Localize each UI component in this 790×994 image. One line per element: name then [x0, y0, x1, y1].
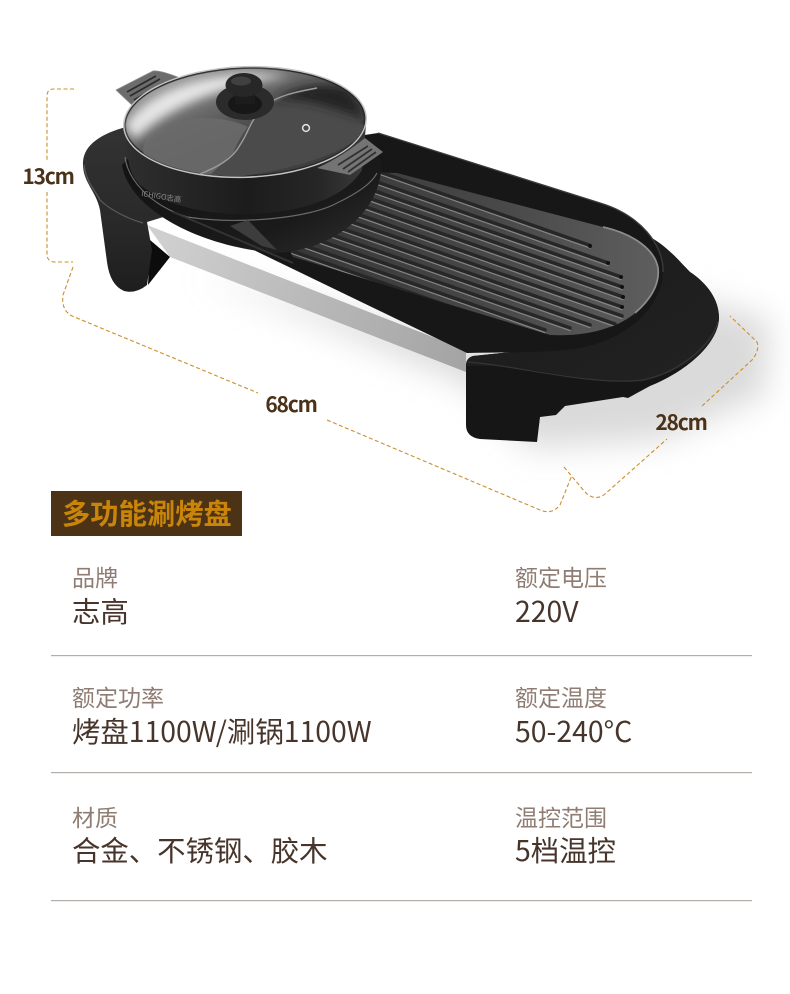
well divider	[230, 220, 277, 250]
dimension label: 13cm: 13cm	[22, 161, 74, 191]
lid knob	[216, 73, 274, 120]
spec: material: 合金、不锈钢、胶木	[72, 829, 328, 870]
pot well	[122, 120, 381, 253]
left foot and platform	[83, 126, 175, 292]
right platform edge	[468, 322, 718, 381]
well ring highlight	[125, 157, 377, 220]
pot body	[127, 125, 366, 214]
spec: material	[72, 799, 328, 870]
grill surface	[250, 170, 658, 335]
vent	[303, 125, 309, 131]
tray upper rim	[378, 133, 663, 272]
spec: rated temperature: 额定温度	[515, 679, 607, 713]
spec: rated temperature	[515, 679, 632, 751]
spec: rated power: 烤盘1100W/涮锅1100W	[72, 710, 372, 751]
dimension line: width	[564, 316, 758, 498]
pot interior left	[143, 118, 248, 176]
heading badge: 多功能涮烤盘	[62, 492, 232, 533]
spec: rated power: 额定功率	[72, 679, 164, 713]
spec: temperature control range	[515, 799, 616, 870]
lid divider	[200, 88, 317, 174]
dimension line: length	[63, 267, 572, 512]
dimension label: 28cm: 28cm	[655, 407, 707, 437]
glass lid	[121, 62, 369, 182]
spec: rated power	[72, 679, 372, 751]
spec: material: 材质	[72, 799, 118, 833]
tray	[130, 133, 663, 353]
spec: temperature control range: 5档温控	[515, 829, 616, 870]
product photo: hot pot and grill	[83, 62, 770, 448]
left handle	[116, 71, 180, 108]
pot interior right	[211, 99, 364, 176]
grill rim highlight	[603, 227, 658, 313]
silver body band	[147, 225, 466, 372]
grill ribs	[290, 172, 625, 334]
right foot and platform	[466, 237, 719, 442]
right platform top	[466, 237, 719, 382]
tray front rail	[173, 212, 293, 263]
pot interior dark corner	[272, 85, 366, 118]
spec: rated voltage: 220V	[515, 590, 579, 631]
lid highlight	[125, 74, 290, 140]
spec: brand	[72, 559, 129, 631]
under foot shadow wedge	[148, 240, 170, 285]
right handle	[317, 138, 383, 175]
pot brand: ICHIGO志高	[141, 188, 183, 205]
spec: brand: 志高	[72, 590, 129, 631]
dimension line: height	[47, 89, 74, 262]
spec: rated voltage: 额定电压	[515, 559, 607, 593]
spec: rated voltage	[515, 559, 607, 631]
spec: rated temperature: 50-240°C	[515, 710, 632, 751]
spec: brand: 品牌	[72, 559, 118, 593]
dimension label: 68cm: 68cm	[265, 389, 317, 419]
left platform highlight	[84, 165, 143, 223]
ground shadow	[200, 275, 770, 448]
spec: temperature control range: 温控范围	[515, 799, 607, 833]
